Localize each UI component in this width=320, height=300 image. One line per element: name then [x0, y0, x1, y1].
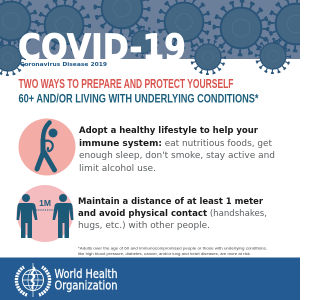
subtitle: Coronavirus Disease 2019 [20, 62, 107, 68]
person right [52, 194, 74, 238]
footnote [78, 246, 267, 256]
title: COVID-19 [18, 28, 186, 68]
organization name: Organization [54, 278, 118, 292]
body text: physical distance: and avoid physical contact (handshakes, [78, 209, 267, 219]
body text: healthy lifestyle: Adopt a healthy lifestyle to help your [79, 126, 259, 136]
body text: physical distance [78, 197, 267, 231]
footnote: like high blood pressure, diabetes, cancer, and/or lung and heart diseases, are more at risk. [78, 252, 251, 256]
body text: physical distance: hugs, etc.) with other people. [78, 221, 210, 231]
footer band [0, 258, 300, 300]
body text: healthy lifestyle [79, 126, 275, 174]
label 1M: 1M [39, 198, 51, 208]
icon: two people one meter apart [16, 185, 74, 242]
organization name: World Health [54, 266, 118, 281]
body text: physical distance: Maintain a distance of at least 1 meter [78, 197, 264, 207]
body text: healthy lifestyle: enough sleep, don't smoke, stay active and [79, 151, 275, 161]
footnote: *Adults over the age of 60 and immunocompromised people or those with underlying conditions, [78, 246, 267, 250]
organization name [54, 266, 118, 292]
body text: healthy lifestyle: limit alcohol use. [79, 164, 156, 174]
header banner [0, 0, 320, 75]
body text: healthy lifestyle: immune system: eat nutritious foods, get [79, 139, 272, 149]
person left [16, 194, 38, 238]
icon: WHO emblem [16, 263, 50, 297]
icon: stretching person [18, 118, 76, 176]
virus pattern [0, 0, 320, 75]
